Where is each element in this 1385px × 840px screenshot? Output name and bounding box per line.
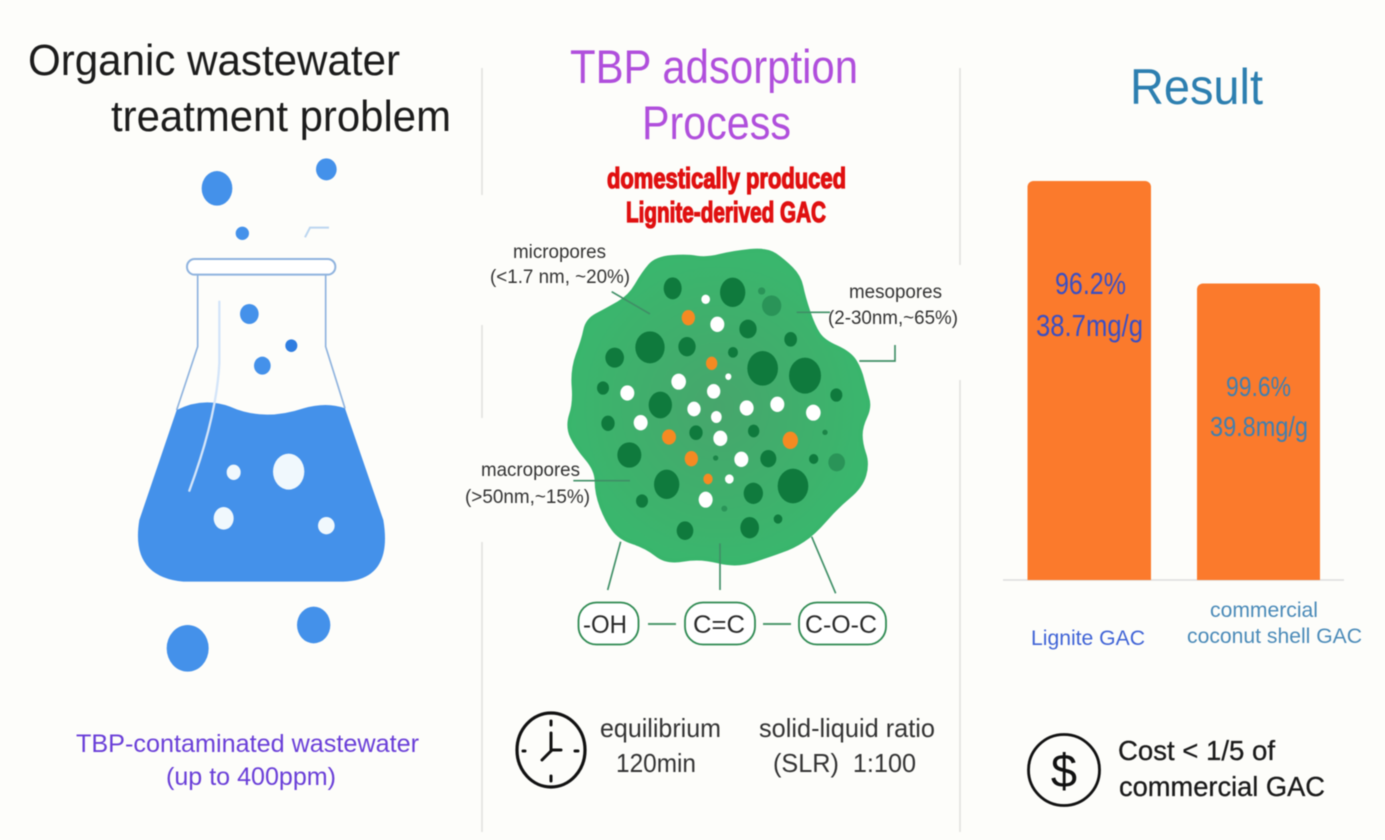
label: micropores: micropores: [513, 241, 606, 263]
subheading: lignite-derived GAC: Lignite-derived GAC: [626, 197, 826, 229]
subheading: lignite-derived GAC: domestically produced: [607, 163, 846, 195]
conditions: solid-liquid ratio: (SLR) 1:100: [773, 748, 916, 778]
bar: lignite GAC: 96.2%: [1055, 266, 1126, 301]
heading: result: Result: [1130, 59, 1263, 115]
functional groups: [578, 602, 886, 644]
caption: wastewater concentration: (up to 400ppm): [166, 763, 336, 791]
label: mesopores: mesopores: [849, 281, 942, 303]
functional groups: -OH: [583, 611, 627, 639]
bar: coconut shell GAC: [1197, 284, 1320, 580]
callout: cost: commercial GAC: [1119, 771, 1325, 802]
caption: wastewater concentration: TBP-contaminated wastewater: [76, 730, 419, 758]
callout: cost: [1118, 735, 1325, 802]
panel: problem: [28, 36, 451, 791]
conditions: equilibrium time: equilibrium: [600, 713, 721, 743]
label: mesopores: [828, 281, 958, 329]
bar: coconut shell GAC: 39.8mg/g: [1210, 411, 1308, 442]
axis label: coconut shell GAC: commercial: [1210, 598, 1318, 622]
heading: problem: treatment problem: [111, 92, 451, 141]
axis label: lignite GAC: Lignite GAC: [1031, 626, 1145, 650]
functional groups: C-O-C: [805, 611, 877, 639]
icon: flask with contaminated water: [138, 158, 385, 672]
panel: adsorption process: [465, 40, 958, 787]
functional groups: C=C: [693, 611, 745, 639]
axis label: coconut shell GAC: coconut shell GAC: [1187, 624, 1362, 648]
label: macropores: (>50nm,~15%): [465, 486, 590, 508]
label: macropores: [465, 459, 590, 508]
bar chart: [1003, 181, 1362, 650]
label: mesopores: (2-30nm,~65%): [828, 307, 958, 329]
conditions: solid-liquid ratio: [759, 713, 935, 778]
conditions: equilibrium time: [600, 713, 721, 778]
bar: coconut shell GAC: 99.6%: [1226, 371, 1291, 402]
icon: clock: [517, 713, 585, 787]
label: macropores: macropores: [481, 459, 580, 481]
conditions: solid-liquid ratio: solid-liquid ratio: [759, 713, 935, 743]
callout: cost: Cost < 1/5 of: [1118, 735, 1275, 766]
bar: lignite GAC: 38.7mg/g: [1036, 308, 1143, 343]
bar: lignite GAC: [1028, 181, 1151, 580]
heading: adsorption process: [570, 40, 858, 149]
label: micropores: [490, 241, 630, 288]
caption: wastewater concentration: [76, 730, 419, 791]
heading: problem: [28, 36, 451, 141]
axis label: coconut shell GAC: [1187, 598, 1362, 648]
heading: adsorption process: TBP adsorption: [570, 40, 858, 93]
subheading: lignite-derived GAC: [607, 163, 846, 229]
panel: result: [1003, 59, 1362, 806]
label: micropores: (<1.7 nm, ~20%): [490, 266, 630, 288]
heading: adsorption process: Process: [642, 96, 791, 149]
icon: dollar: $: [1051, 744, 1077, 797]
conditions: equilibrium time: 120min: [616, 748, 696, 778]
diagram: porous carbon granule: [569, 251, 895, 593]
icon: dollar: [1028, 734, 1100, 806]
heading: problem: Organic wastewater: [28, 36, 400, 85]
